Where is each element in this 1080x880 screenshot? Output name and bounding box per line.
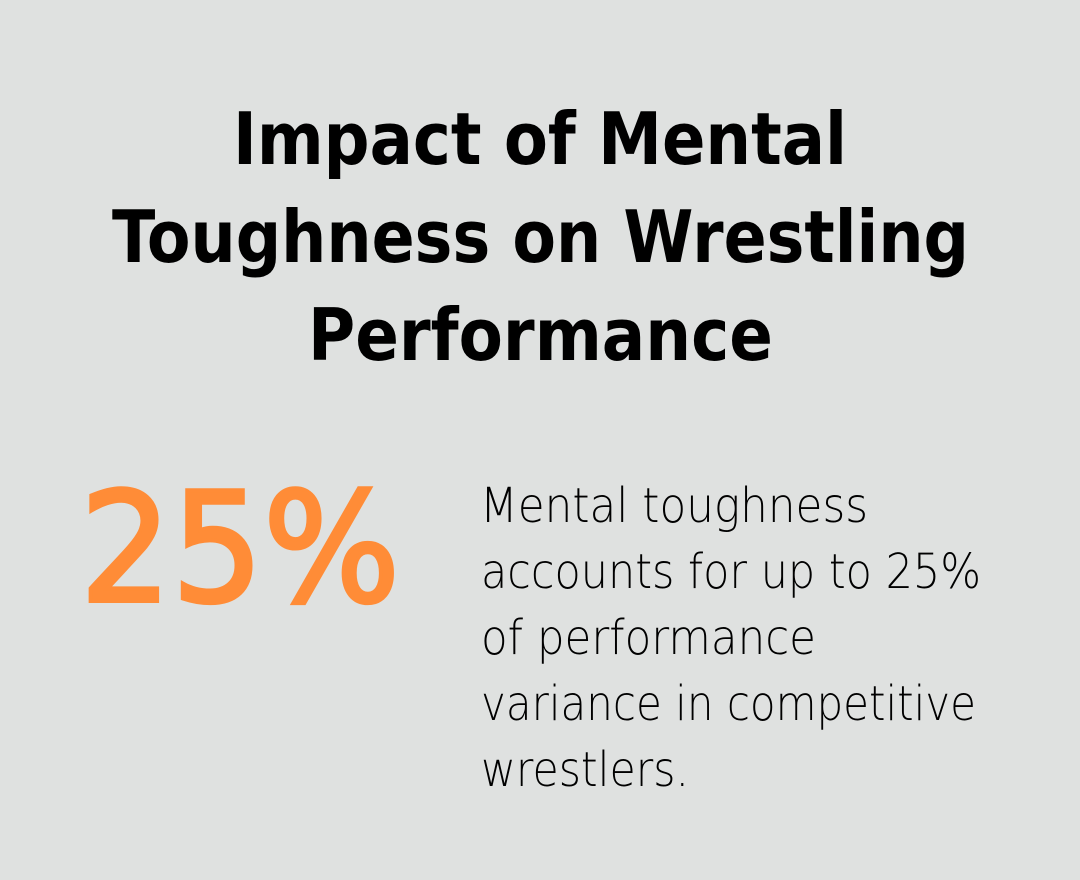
description text: Mental toughness [480,478,868,534]
title [112,97,969,377]
description text: variance in competitive [481,676,976,732]
description text [480,478,981,798]
title: Impact of Mental [233,97,847,181]
statistic: 25%: 25% [80,460,400,637]
description text: accounts for up to 25% [481,544,981,600]
title: Toughness on Wrestling [112,195,969,279]
description text: wrestlers. [481,742,689,798]
description text: of performance [481,610,816,666]
title: Performance [308,293,773,377]
